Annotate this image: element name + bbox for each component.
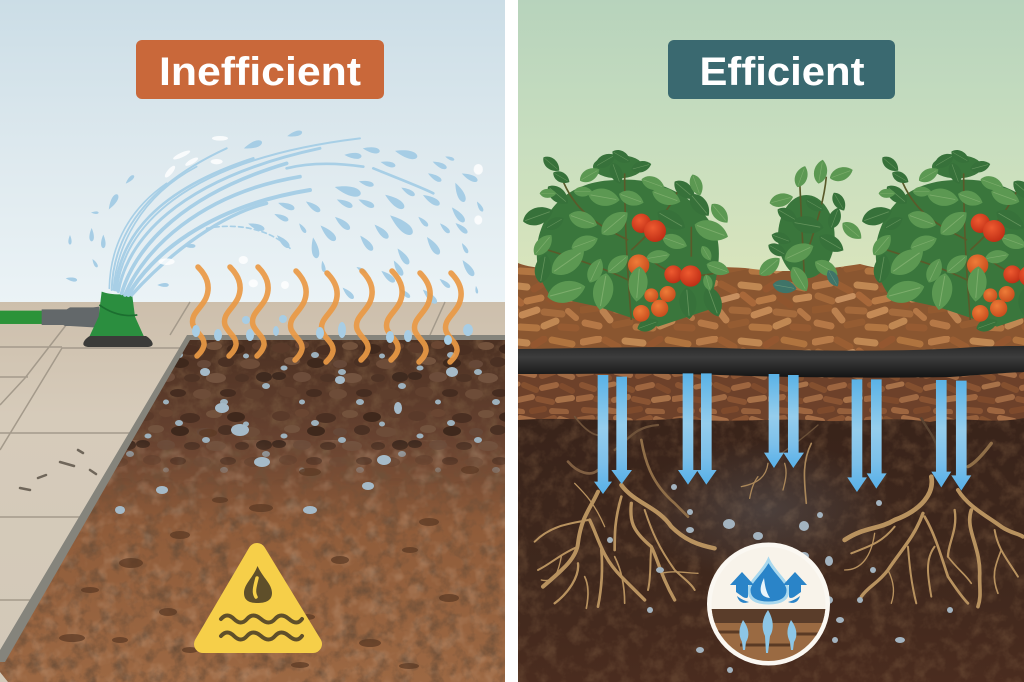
- arrow pair 5: [931, 380, 971, 491]
- heading: Inefficient: [136, 40, 384, 99]
- icon: soil moisture badge: [707, 542, 830, 669]
- heat waves: [192, 267, 461, 362]
- subsoil: [518, 410, 1024, 682]
- hose coupling: [42, 307, 99, 327]
- badge upper panel: [712, 547, 826, 661]
- garden hose: [0, 311, 43, 324]
- upward arrows: [730, 572, 754, 598]
- young plant centre: [755, 159, 865, 295]
- water drop: [749, 560, 788, 603]
- sprinkler body: [89, 292, 144, 337]
- surface water beads: [192, 315, 473, 345]
- sprinkler base: [83, 336, 153, 347]
- tomato plant right: [859, 147, 1024, 334]
- arrow pair 1: [594, 375, 632, 494]
- badge ring: [707, 542, 830, 666]
- soil stones: [607, 484, 953, 673]
- drip hose: [518, 346, 1024, 378]
- sprouting water roots: [739, 610, 796, 653]
- icon: sprinkler and hose: [0, 292, 153, 347]
- curb: [0, 335, 505, 662]
- heading: Efficient: [668, 40, 895, 99]
- badge soil section: [712, 609, 826, 661]
- panel: inefficient: [0, 0, 505, 682]
- icon: warning triangle with drop: [203, 552, 313, 644]
- heading: Efficient: Efficient: [700, 50, 864, 94]
- roots left: [535, 417, 715, 608]
- paving: [0, 302, 505, 682]
- roots right: [845, 418, 1023, 607]
- moisture haze: [668, 458, 862, 558]
- soil with gravel: [0, 335, 505, 682]
- arrow pair 3: [764, 374, 804, 468]
- water droplets: [65, 130, 484, 305]
- tomato plant left: [520, 147, 732, 334]
- upper mulch layer: [518, 263, 1024, 352]
- arrow pair 4: [847, 379, 887, 492]
- arrow pair 2: [678, 373, 717, 485]
- sky background: [518, 0, 1024, 290]
- water spray arc: [65, 130, 484, 305]
- panel: efficient: [518, 0, 1024, 682]
- lower mulch layer: [518, 372, 1024, 422]
- sky background: [0, 0, 505, 303]
- water arrows: [594, 373, 971, 494]
- heading: Inefficient: Inefficient: [159, 50, 361, 94]
- roots centre: [741, 425, 818, 503]
